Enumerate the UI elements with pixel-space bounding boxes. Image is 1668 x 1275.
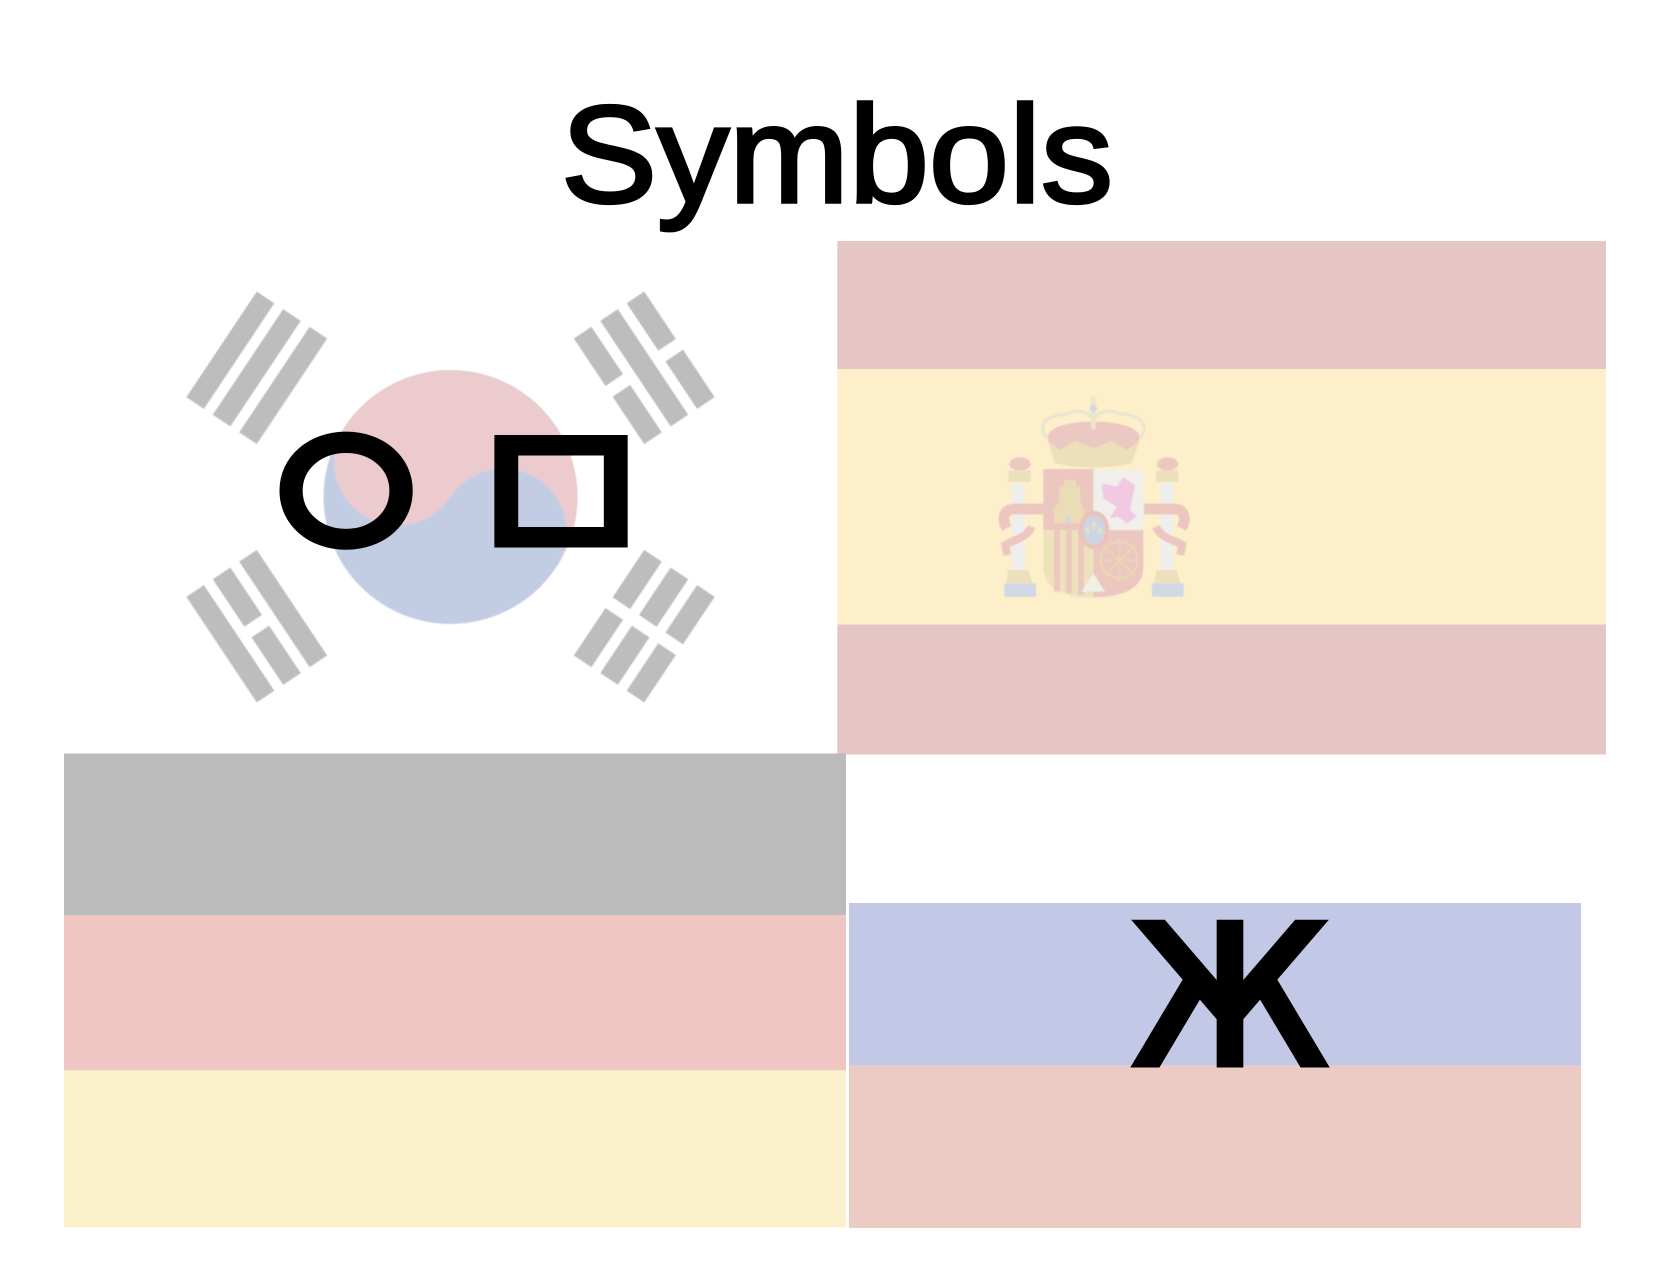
panel: Germany flag [64, 754, 846, 1227]
shield [1043, 469, 1093, 530]
lion [1102, 477, 1137, 523]
panel: South Korea flag [70, 243, 832, 751]
icon: Spanish coat of arms [1004, 396, 1184, 598]
symbol: Korean letter ieung: ㅇ [242, 372, 450, 626]
icon: taegeuk circle [274, 321, 627, 673]
crown [1047, 422, 1140, 457]
icon: trigram bottom left [186, 550, 327, 702]
title: Symbols [561, 78, 1113, 232]
right pillar [1144, 457, 1184, 597]
icon: trigram top left [186, 292, 327, 444]
castle [1054, 480, 1084, 523]
icon: trigram top right [574, 292, 715, 444]
centre oval [1079, 511, 1109, 549]
symbol: Korean letter mieum: ㅁ [456, 372, 664, 626]
panel: Spain flag [837, 241, 1606, 754]
symbol: Cyrillic letter zhe: Ж [1135, 889, 1325, 1108]
panel: Russia flag [849, 757, 1581, 1228]
icon: trigram bottom right [574, 550, 715, 702]
left pillar [1004, 457, 1043, 597]
